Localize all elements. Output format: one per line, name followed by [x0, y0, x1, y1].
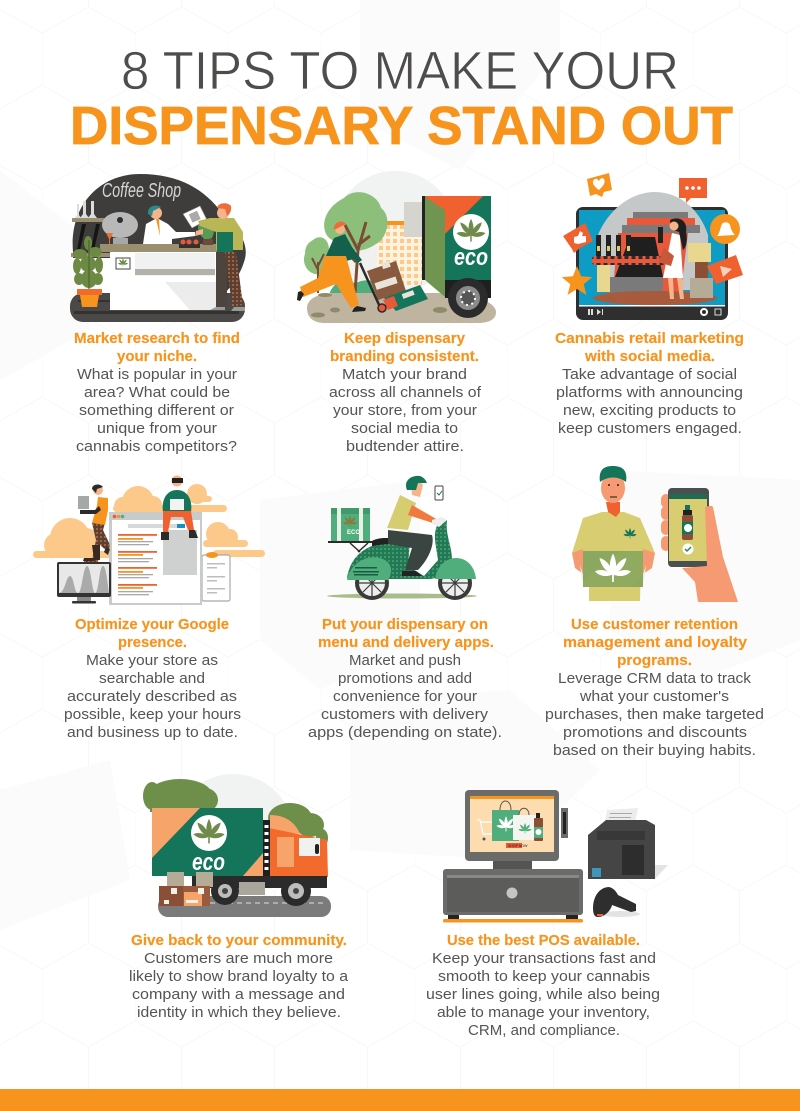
heading: presence. — [118, 635, 187, 651]
heading: with social media. — [584, 349, 715, 365]
title — [70, 41, 733, 156]
heading: Cannabis retail marketing — [555, 331, 744, 347]
illustration: coffee shop: Coffee Shop — [102, 180, 181, 202]
heading: Use the best POS available. — [447, 933, 640, 949]
heading — [563, 617, 748, 669]
body text: cannabis competitors? — [76, 438, 237, 455]
body text: and business up to date. — [67, 724, 238, 741]
body text: area? What could be — [84, 384, 230, 401]
heading — [330, 331, 479, 365]
body text — [64, 652, 241, 741]
body text: Customers are much more — [144, 950, 333, 967]
heading — [74, 331, 240, 365]
body text: promotions and discounts — [563, 724, 747, 741]
body text — [556, 366, 743, 437]
body text: customers with delivery — [321, 706, 489, 723]
panel: tip 7 community — [129, 774, 349, 1021]
illustration: coffee shop — [70, 174, 246, 322]
body text: apps (depending on state). — [308, 724, 502, 741]
heading: programs. — [617, 653, 692, 669]
body text: social media to — [351, 420, 458, 437]
illustration: courier and phone — [572, 466, 738, 602]
body text: user lines going, while also being — [426, 986, 660, 1003]
body text: smooth to keep your cannabis — [438, 968, 650, 985]
body text: CRM, and compliance. — [468, 1022, 620, 1039]
heading — [318, 617, 494, 651]
body text: accurately described as — [67, 688, 237, 705]
body text: Market and push — [349, 652, 461, 669]
body text: purchases, then make targeted — [545, 706, 764, 723]
body text: identity in which they believe. — [137, 1004, 341, 1021]
illustration: POS terminal, printer and scanner — [443, 790, 668, 922]
body text: based on their buying habits. — [553, 742, 756, 759]
illustration: delivery scooter: ECO — [347, 530, 360, 536]
illustration: eco delivery lorry — [143, 774, 331, 917]
illustration: eco truck and courier: eco — [454, 244, 488, 271]
heading: menu and delivery apps. — [318, 635, 494, 651]
panel: tip 6 loyalty — [545, 466, 764, 759]
illustration: eco delivery lorry: eco — [192, 849, 225, 876]
body text: able to manage your inventory, — [437, 1004, 650, 1021]
body text: convenience for your — [333, 688, 477, 705]
body text: What is popular in your — [77, 366, 237, 383]
body text — [308, 652, 502, 741]
heading: Optimize your Google — [75, 617, 229, 633]
body text: unique from your — [97, 420, 217, 437]
illustration: eco truck and courier — [297, 171, 496, 323]
panel: tip 5 delivery apps — [308, 476, 502, 741]
heading: Put your dispensary on — [322, 617, 488, 633]
body text: possible, keep your hours — [64, 706, 241, 723]
body text: Leverage CRM data to track — [558, 670, 752, 687]
body text: keep customers engaged. — [558, 420, 742, 437]
body text: budtender attire. — [346, 438, 464, 455]
illustration: video screen with social icons — [562, 173, 743, 320]
panel: tip 2 branding — [297, 171, 496, 455]
body text: across all channels of — [329, 384, 482, 401]
title line 1: 8 TIPS TO MAKE YOUR — [121, 41, 679, 101]
body text — [76, 366, 237, 455]
heading: management and loyalty — [563, 635, 748, 651]
heading: branding consistent. — [330, 349, 479, 365]
body text: new, exciting products to — [563, 402, 736, 419]
body text: your store, from your — [333, 402, 477, 419]
panel: tip 4 google presence — [33, 476, 265, 741]
body text: promotions and add — [338, 670, 472, 687]
body text: something different or — [79, 402, 234, 419]
body text — [426, 950, 660, 1039]
heading: your niche. — [117, 349, 197, 365]
body text: Keep your transactions fast and — [432, 950, 656, 967]
body text — [329, 366, 482, 455]
panel: tip 1 market research — [70, 174, 246, 455]
heading — [75, 617, 229, 651]
illustration: POS terminal, printer and scanner: SHOP NOW — [508, 844, 528, 848]
heading: Use customer retention — [571, 617, 738, 633]
heading: Give back to your community. — [131, 933, 347, 949]
body text: Match your brand — [342, 366, 467, 383]
body text: what your customer's — [579, 688, 729, 705]
body text — [129, 950, 349, 1021]
footer bar — [0, 1089, 800, 1111]
body text — [545, 670, 764, 759]
body text: likely to show brand loyalty to a — [129, 968, 349, 985]
illustration: delivery scooter — [327, 476, 477, 598]
body text: searchable and — [99, 670, 205, 687]
body text: platforms with announcing — [556, 384, 743, 401]
body text: company with a message and — [132, 986, 345, 1003]
heading: Keep dispensary — [344, 331, 466, 347]
heading — [555, 331, 744, 365]
illustration: website with clouds and people — [33, 476, 265, 605]
panel: tip 3 social media — [555, 173, 744, 437]
heading: Market research to find — [74, 331, 240, 347]
body text: Make your store as — [86, 652, 218, 669]
body text: Take advantage of social — [562, 366, 737, 383]
panel: tip 8 POS — [426, 790, 668, 1039]
title line 2: DISPENSARY STAND OUT — [70, 96, 733, 156]
